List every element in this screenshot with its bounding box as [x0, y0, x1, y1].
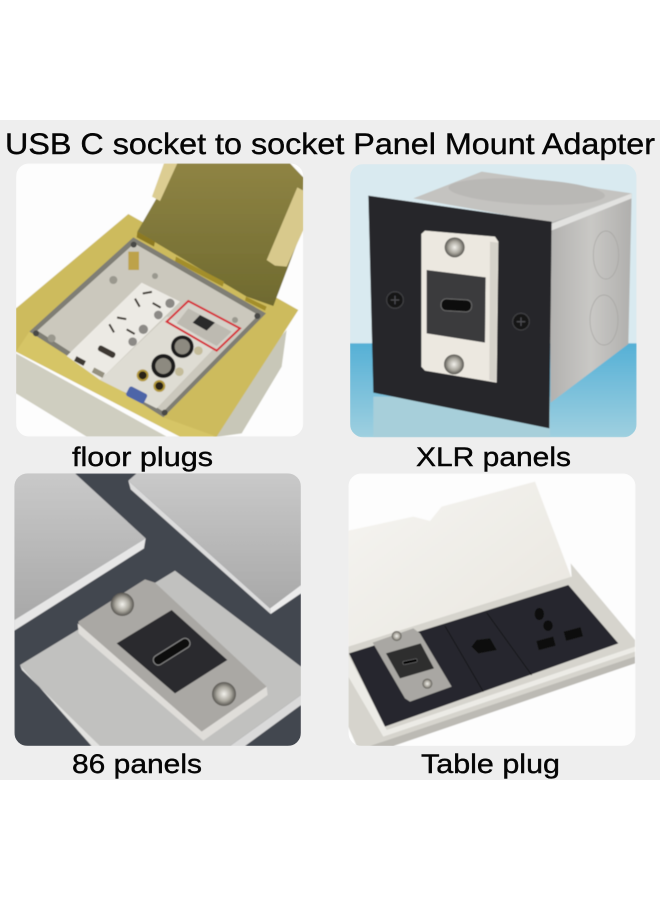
corner screws: [33, 242, 260, 416]
socket plate: [67, 283, 241, 408]
black socket panel: [349, 585, 618, 727]
box sides: [16, 330, 287, 437]
small HDMI style ports: [74, 291, 161, 378]
open lid: [137, 163, 303, 311]
black USB C block: [386, 643, 434, 678]
panel: floor plugs photo: [16, 163, 303, 437]
open lid: [348, 482, 572, 650]
gold jacks: [138, 370, 164, 391]
panel: XLR panels photo: [350, 164, 637, 437]
label: Table plug: Table plug: [421, 749, 560, 779]
steel mount plate: [373, 628, 452, 702]
mount screws: [392, 631, 432, 689]
USB C slot: [151, 636, 192, 667]
black face plate: [368, 196, 552, 428]
steel mount plate: [421, 231, 498, 383]
silver frame: [348, 563, 635, 746]
black USB C block: [117, 610, 227, 693]
label: 86 panels: 86 panels: [72, 749, 202, 779]
lower brass front highlight: [16, 332, 217, 437]
plate fixing screws: [48, 273, 238, 342]
steel mount plate: [78, 579, 268, 741]
red highlight box: [167, 301, 240, 351]
USB C slot: [441, 299, 472, 312]
base plate: [20, 571, 301, 746]
steel box: [413, 172, 632, 403]
panel: 86 panels photo: [14, 473, 301, 746]
USB C slot: [402, 659, 418, 665]
VGA port: [125, 386, 148, 404]
XLR sockets: [151, 335, 203, 378]
label: floor plugs: floor plugs: [72, 442, 213, 472]
panel: table plug photo: [348, 473, 636, 746]
network jack: [472, 638, 497, 653]
face plate screws: [387, 292, 529, 330]
USB C module: [177, 308, 232, 346]
label: XLR panels: XLR panels: [416, 442, 571, 472]
mount screws: [444, 237, 465, 374]
inner opening: [29, 237, 266, 417]
top right plate: [128, 473, 301, 614]
module dividers: [445, 613, 532, 692]
mount screws: [111, 593, 236, 706]
background band: [0, 120, 660, 780]
bottom right plate corner: [230, 695, 301, 746]
black USB C block: [427, 270, 486, 343]
brass post: [128, 252, 139, 270]
title: USB C socket to socket Panel Mount Adapter: [5, 128, 655, 161]
brass frame: [16, 214, 298, 437]
top left plate: [14, 473, 146, 631]
earth pins: [128, 299, 175, 346]
universal socket holes: [535, 608, 583, 650]
